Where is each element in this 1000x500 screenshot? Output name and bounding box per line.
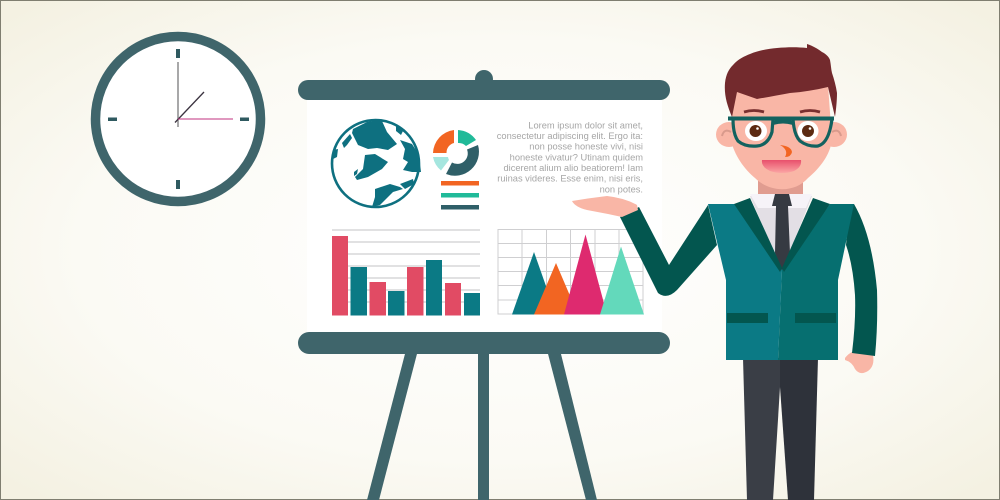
board sheet: [307, 96, 662, 336]
segment: mint: [433, 157, 449, 170]
trousers: [743, 358, 818, 500]
text block: dicerent alium alio beatiorem! Iam: [503, 163, 643, 173]
shirt: [750, 196, 812, 272]
text block: ruinas videres. Esse enim, nisi eris,: [497, 174, 643, 184]
eyebrows: [744, 110, 820, 112]
neck: [758, 174, 803, 194]
area chart: [498, 230, 644, 314]
bar chart: [332, 230, 480, 316]
text block: non posse honeste vivi, nisi: [529, 142, 643, 152]
icon: globe: [332, 120, 421, 207]
icon: wall clock: [96, 36, 260, 202]
nose: [780, 145, 792, 157]
text block: [497, 120, 643, 194]
hair: [725, 44, 837, 117]
top roller: [298, 80, 670, 100]
face: [731, 85, 832, 189]
text block: non potes.: [600, 184, 643, 194]
jacket: [708, 198, 854, 360]
pointing arm: [620, 205, 717, 296]
ears: [716, 122, 847, 147]
glasses: [728, 118, 834, 146]
presentation board: [298, 70, 670, 500]
top roller knob: [475, 70, 493, 88]
tie: [772, 194, 792, 271]
easel legs: [367, 350, 597, 500]
bottom rail: [298, 332, 670, 354]
open hand: [572, 196, 638, 217]
text block: honeste vivatur? Utinam quidem: [510, 152, 643, 162]
text block: Lorem ipsum dolor sit amet,: [528, 120, 643, 130]
right arm and hand: [845, 204, 877, 373]
donut chart: [433, 130, 479, 176]
eyes: [745, 121, 818, 141]
segment: orange: [433, 130, 454, 153]
text block: consectetur adipiscing elit. Ergo ita:: [497, 131, 643, 141]
donut legend: [441, 181, 479, 210]
presenter character: [572, 44, 877, 500]
segment: green: [458, 130, 476, 146]
segment: dark teal: [446, 145, 479, 176]
mouth: [762, 160, 801, 173]
